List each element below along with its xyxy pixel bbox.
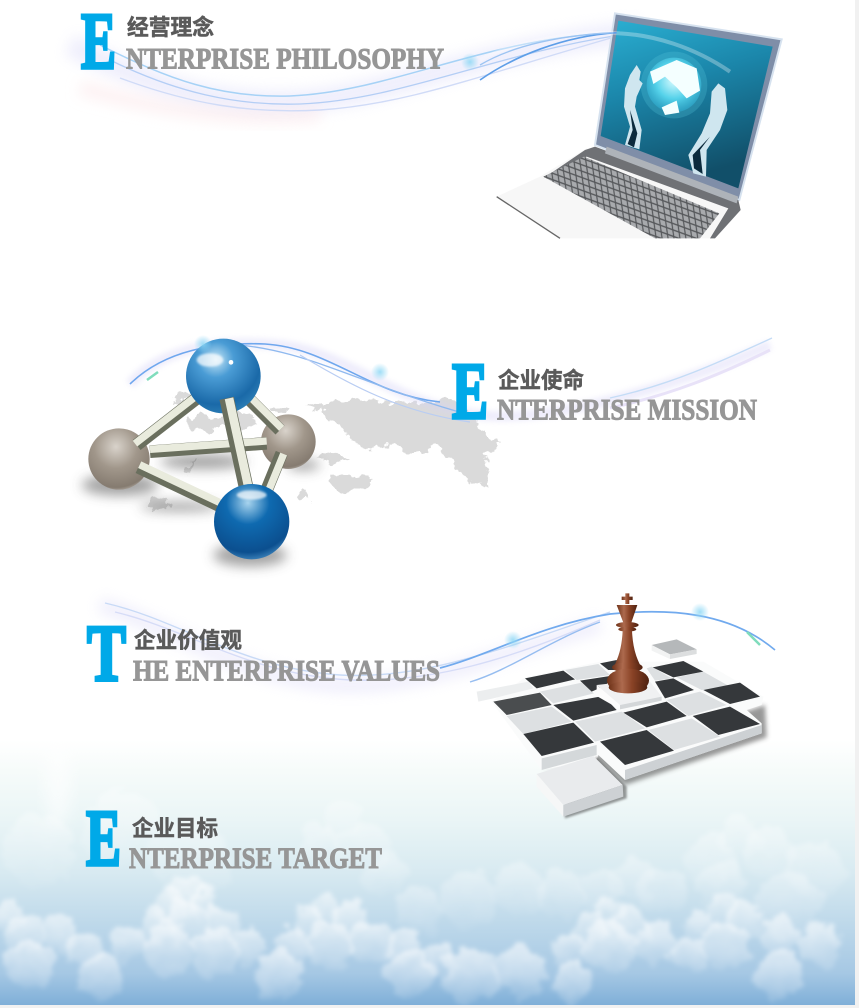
chess king <box>607 593 649 693</box>
black squares <box>493 660 760 765</box>
heading: enterprise mission: 企业使命 <box>498 368 584 393</box>
glow dots on ribbons <box>194 53 709 649</box>
heading: the enterprise values: 企业价值观 <box>134 628 242 653</box>
heading: enterprise philosophy <box>81 0 444 86</box>
top blue ball <box>186 339 261 413</box>
laptop lid <box>595 13 782 200</box>
heading: the enterprise values: HE ENTERPRISE VALUES <box>133 654 440 688</box>
left hand <box>624 65 643 149</box>
molecule rods <box>135 397 284 506</box>
molecule shadow <box>82 454 320 566</box>
wave ribbon: values <box>100 603 775 685</box>
heading: enterprise target: 企业目标 <box>132 816 218 841</box>
laptop illustration <box>480 13 782 238</box>
chess illustration <box>477 593 767 818</box>
detached block back <box>652 639 697 659</box>
hinge <box>605 147 738 203</box>
heading: enterprise philosophy: 经营理念 <box>127 15 214 40</box>
world map <box>143 393 503 513</box>
white squares <box>507 664 730 750</box>
heading: enterprise target: NTERPRISE TARGET <box>129 842 382 875</box>
bottom blue ball <box>214 484 289 559</box>
central rod <box>227 398 249 490</box>
sky and clouds background <box>0 740 855 1005</box>
wave ribbon: mission <box>130 338 772 422</box>
translucent ribbon over lid <box>480 33 730 72</box>
board base <box>492 662 763 780</box>
heading: enterprise philosophy: NTERPRISE PHILOSOPHY <box>126 42 444 76</box>
board shadow <box>542 705 767 785</box>
heading: enterprise mission: NTERPRISE MISSION <box>497 394 757 426</box>
heading: enterprise mission: E <box>452 348 488 436</box>
heading: enterprise target: E <box>86 795 121 883</box>
heading: enterprise mission <box>452 348 757 436</box>
left grey ball <box>88 428 150 490</box>
globe on screen <box>641 52 707 118</box>
heading: enterprise philosophy: E <box>81 0 116 86</box>
wave ribbon: philosophy <box>70 32 640 116</box>
detached block front <box>537 756 627 818</box>
pedestal <box>597 679 662 709</box>
heading: the enterprise values: T <box>87 610 126 698</box>
heading: enterprise target <box>86 795 382 883</box>
heading: the enterprise values <box>87 610 440 698</box>
molecule illustration <box>82 339 320 566</box>
detached block left <box>477 682 533 702</box>
keyboard <box>543 157 719 238</box>
laptop screen <box>601 21 773 188</box>
right hand <box>688 83 727 177</box>
laptop deck <box>497 148 738 238</box>
right grey ball <box>261 414 316 469</box>
